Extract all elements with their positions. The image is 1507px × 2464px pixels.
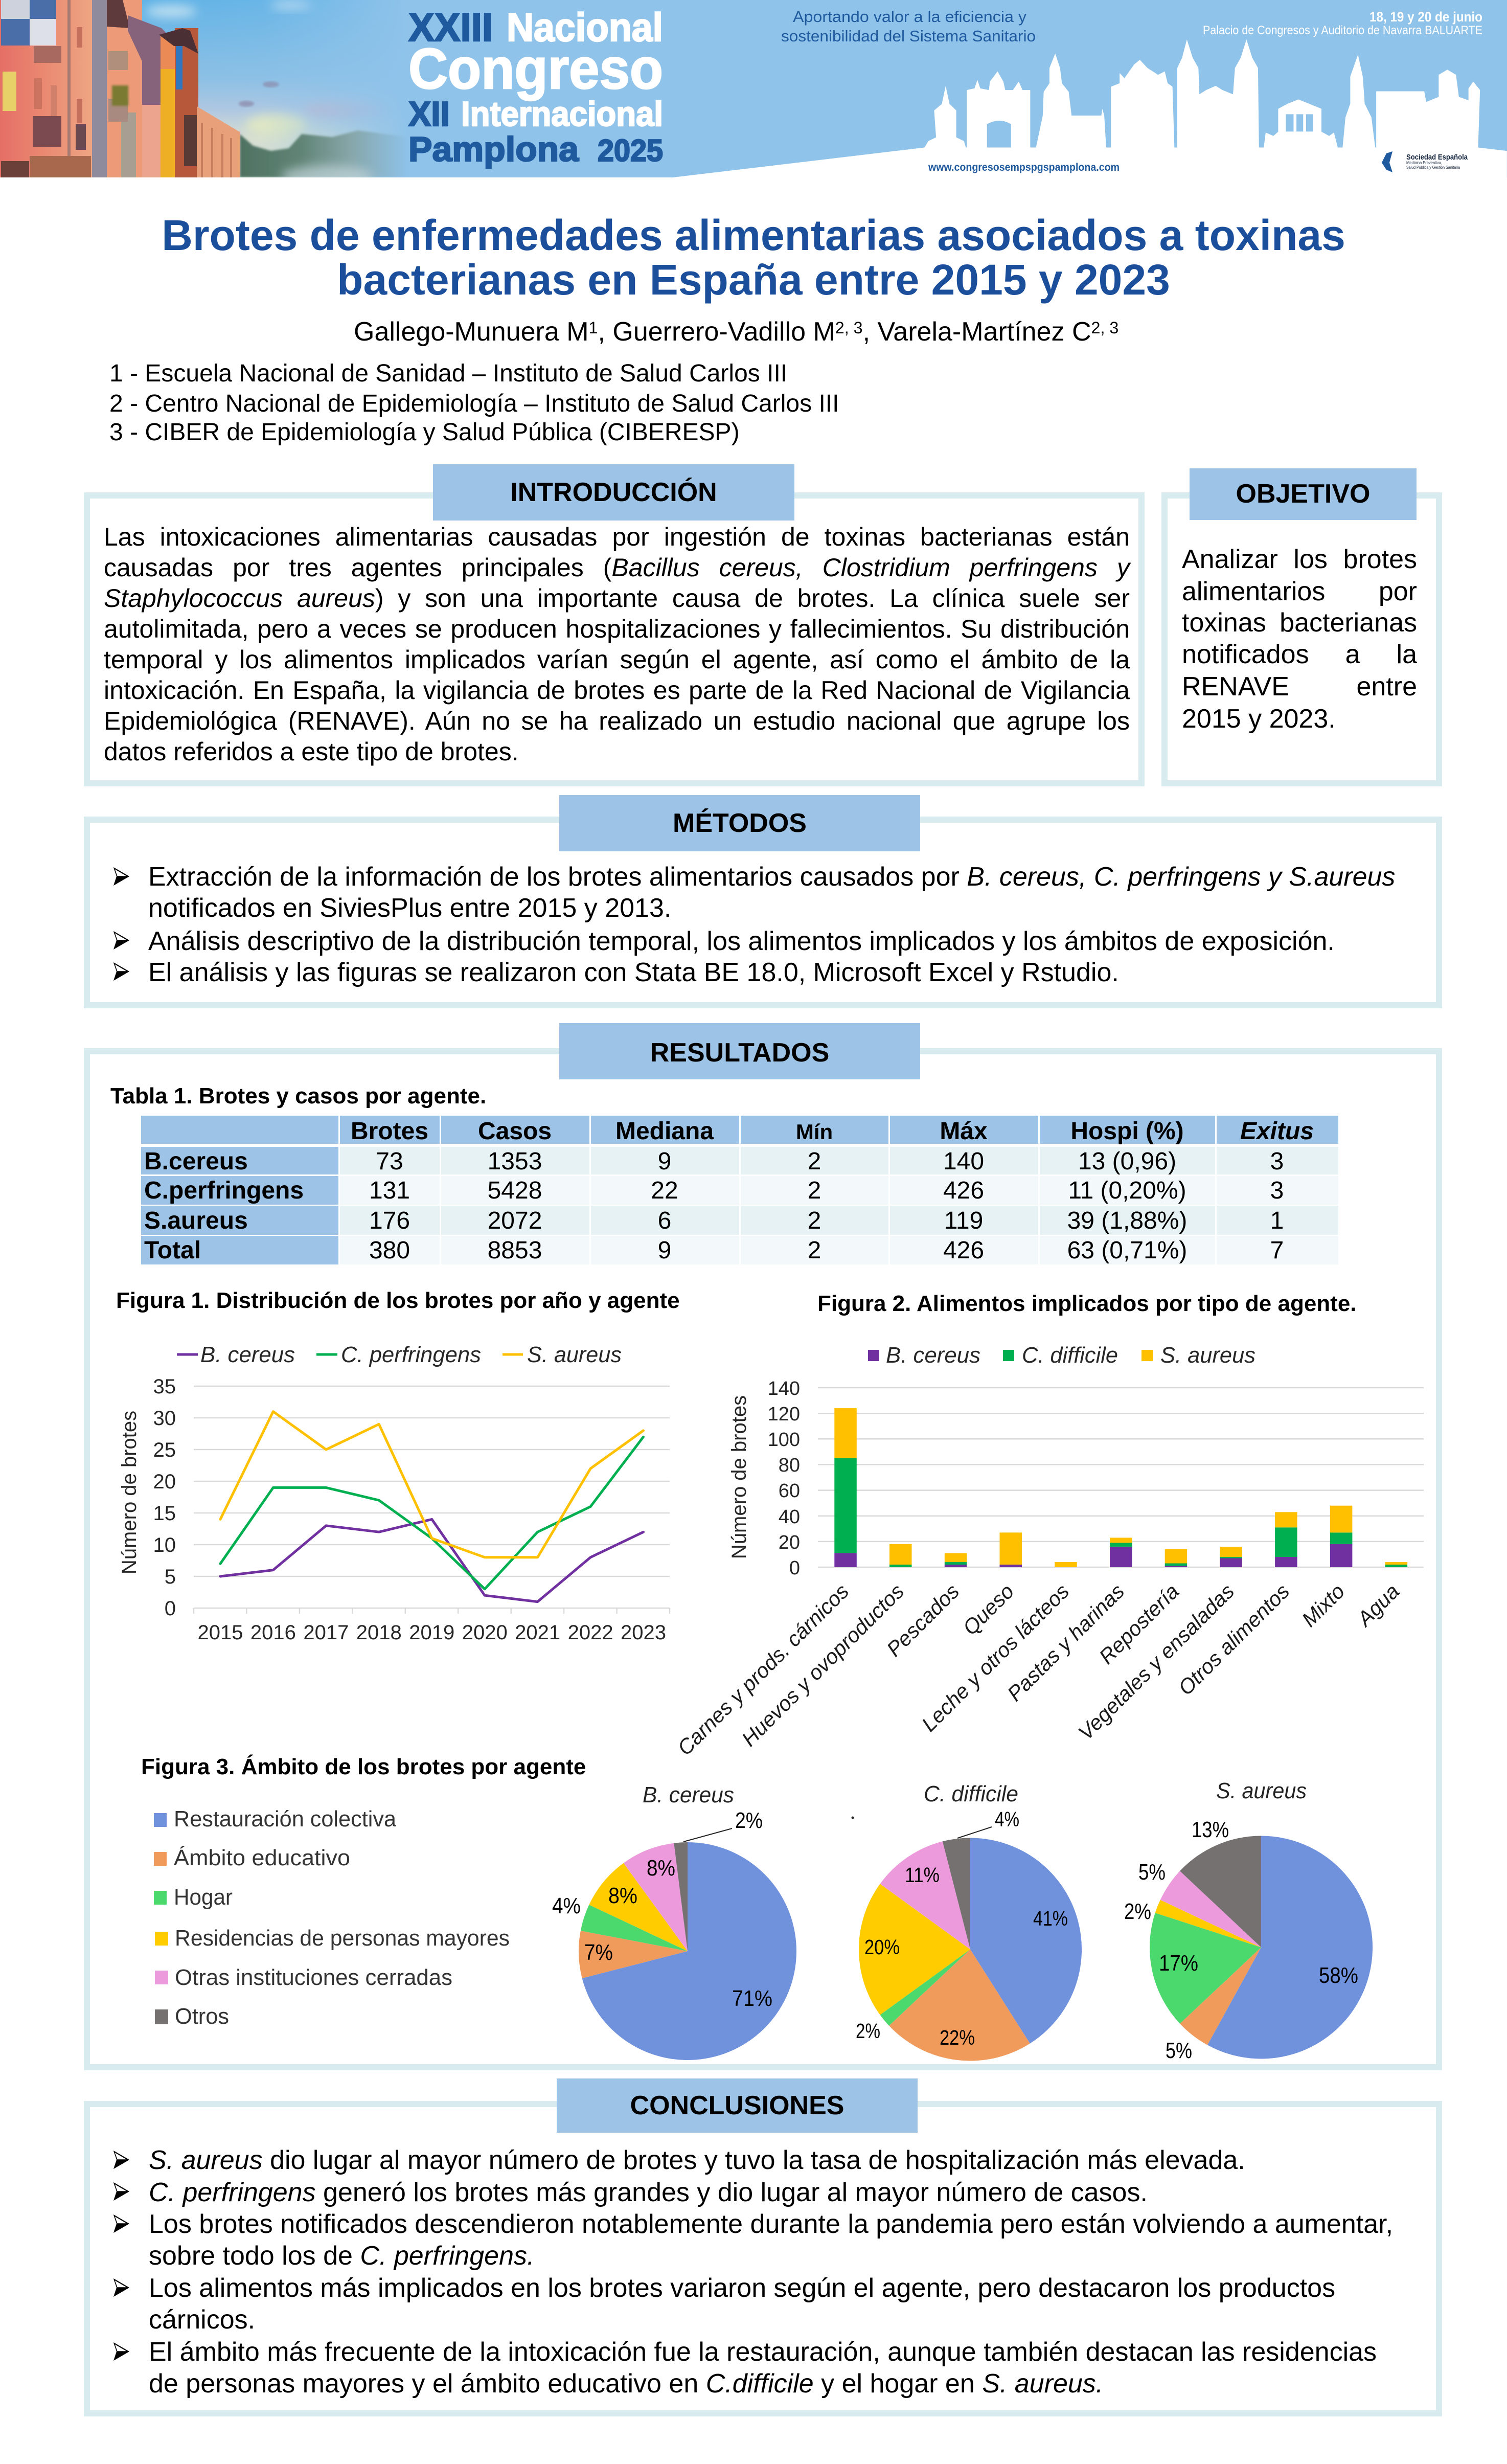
pie chart: B. cereus <box>552 1782 796 2060</box>
congress date and venue: Palacio de Congresos y Auditorio de Navarra BALUARTE <box>1203 24 1482 37</box>
figure 1 legend: S. aureus <box>527 1342 622 1367</box>
figure 1 legend: B. cereus <box>200 1342 295 1367</box>
table 1: 6 <box>658 1207 671 1234</box>
affiliations: 3 - CIBER de Epidemiología y Salud Pública (CIBERESP) <box>109 419 740 446</box>
pie chart: C. difficile: 2% <box>856 2019 880 2043</box>
pie chart: B. cereus: B. cereus <box>643 1782 734 1807</box>
table 1: 9 <box>658 1148 671 1175</box>
pie chart: S. aureus: S. aureus <box>1216 1778 1307 1803</box>
figure 3 legend <box>154 1806 510 2029</box>
congress slogan: sostenibilidad del Sistema Sanitario <box>781 27 1036 45</box>
list: conclusiones: S. aureus dio lugar al mayor número de brotes y tuvo la tasa de hospitalización más elevada. <box>149 2145 1245 2175</box>
table 1: Mín <box>796 1120 833 1144</box>
figure 3 legend: Otros <box>175 2004 229 2029</box>
figure 3 legend: Residencias de personas mayores <box>175 1926 510 1951</box>
figure 1 axis labels: 10 <box>153 1534 176 1556</box>
figure 2 category labels: Agua <box>1352 1579 1404 1632</box>
figure 1 axis labels: 2016 <box>250 1621 296 1644</box>
text block: objetivo: RENAVE entre <box>1182 672 1417 702</box>
table 1: 63 (0,71%) <box>1067 1237 1187 1264</box>
list: conclusiones: C. perfringens generó los brotes más grandes y dio lugar al mayor número de casos. <box>149 2178 1148 2207</box>
figure 2 axis labels: 20 <box>779 1532 800 1553</box>
heading: objetivo: OBJETIVO <box>1236 479 1370 509</box>
table 1: 39 (1,88%) <box>1067 1207 1187 1234</box>
figure 2 bars: S. aureus <box>834 1408 1407 1567</box>
text block: introducción: temporal y los alimentos implicados varían según el agente, así como el ámbito de la <box>104 645 1130 674</box>
figure 2 axis labels: 120 <box>768 1404 800 1425</box>
figure 2 category labels: Queso <box>958 1579 1018 1640</box>
table 1: Mediana <box>615 1118 714 1145</box>
list: métodos: Extracción de la información de los brotes alimentarios causados por B. cereus, C. perfringens y S.aureus <box>148 862 1395 892</box>
table 1: 131 <box>369 1177 410 1204</box>
congress name: 2025 <box>598 133 663 168</box>
table 1: Exitus <box>1240 1118 1314 1145</box>
pie chart: S. aureus: 58% <box>1319 1963 1358 1988</box>
list: conclusiones <box>113 2145 1393 2399</box>
figure 2 legend: C. difficile <box>1022 1343 1118 1368</box>
society logo: Sociedad Española <box>1406 153 1468 162</box>
figure 2 legend: B. cereus <box>886 1343 980 1368</box>
society logo <box>1382 151 1468 172</box>
figure 1 axis labels: 2019 <box>409 1621 454 1644</box>
pie chart: B. cereus: 2% <box>735 1808 763 1833</box>
figure 1 axis labels: 15 <box>153 1502 176 1525</box>
congress name: XXIII <box>408 5 493 50</box>
panel: resultados <box>84 1023 1442 2070</box>
society logo: Medicina Preventiva, <box>1406 161 1442 165</box>
table 1: 5428 <box>488 1177 542 1204</box>
heading: métodos: MÉTODOS <box>673 808 807 838</box>
figure 1 axis labels: 25 <box>153 1439 176 1461</box>
figure 1 axis labels: 5 <box>165 1566 176 1588</box>
text block: objetivo: Analizar los brotes <box>1182 545 1417 574</box>
affiliations: 1 - Escuela Nacional de Sanidad – Instituto de Salud Carlos III <box>109 360 787 387</box>
pie chart: C. difficile: C. difficile <box>924 1781 1018 1806</box>
figure 3 title: Figura 3. Ámbito de los brotes por agente <box>141 1754 586 1779</box>
table 1: B.cereus <box>144 1148 248 1175</box>
congress slogan <box>781 8 1036 45</box>
table 1: 119 <box>944 1207 983 1234</box>
figure 2: stacked bar chart: Número de brotes <box>728 1395 750 1559</box>
table 1: 2 <box>808 1177 821 1204</box>
figure 1 title: Figura 1. Distribución de los brotes por año y agente <box>116 1288 680 1313</box>
text block: introducción: intoxicación. En España, la vigilancia de brotes es parte de la Red Nacional de Vigilancia <box>104 676 1130 705</box>
figure 3 legend: Ámbito educativo <box>174 1845 350 1870</box>
table 1: 2072 <box>488 1207 542 1234</box>
figure 2 category labels: Carnes y prods. cárnicos <box>673 1579 853 1760</box>
text block: introducción: Staphylococcus aureus) y son una importante causa de brotes. La clínica suele ser <box>104 584 1130 613</box>
pie chart: S. aureus: 13% <box>1192 1817 1229 1842</box>
figure 1 axis labels: 30 <box>153 1407 176 1430</box>
list: conclusiones: El ámbito más frecuente de la intoxicación fue la restauración, aunque también destacan las residencias <box>149 2337 1377 2367</box>
text block: introducción: datos referidos a este tipo de brotes. <box>104 737 519 766</box>
heading: resultados <box>559 1023 920 1079</box>
table 1: 8853 <box>488 1237 542 1264</box>
panel: conclusiones <box>84 2078 1442 2416</box>
table 1: 3 <box>1270 1177 1284 1204</box>
text block: objetivo: notificados a la <box>1182 640 1417 669</box>
figure 2 category labels: Mixto <box>1297 1579 1349 1632</box>
pie chart: C. difficile: 22% <box>940 2026 975 2049</box>
heading: métodos <box>559 795 920 851</box>
pie chart: C. difficile: 20% <box>864 1935 900 1959</box>
figure 2 legend: S. aureus <box>1160 1343 1255 1368</box>
title <box>162 211 1345 304</box>
table 1: 380 <box>369 1237 410 1264</box>
table 1: 7 <box>1270 1237 1284 1264</box>
figure 1 axis labels: 2015 <box>198 1621 243 1644</box>
figure 3 legend: Restauración colectiva <box>174 1806 397 1832</box>
panel: objetivo <box>1161 468 1442 786</box>
pie chart: S. aureus: 5% <box>1138 1860 1166 1885</box>
table 1: 426 <box>943 1237 984 1264</box>
figure 2 axis labels: 80 <box>779 1455 800 1476</box>
pie chart: S. aureus: 17% <box>1159 1951 1198 1976</box>
figure 1 series <box>220 1412 643 1602</box>
panel: introducción <box>84 464 1145 786</box>
table 1: 426 <box>943 1177 984 1204</box>
table 1: 13 (0,96) <box>1078 1148 1176 1175</box>
table 1: 2 <box>808 1207 821 1234</box>
figure 1 axis labels: 2023 <box>621 1621 666 1644</box>
figure 1 axis labels: Número de brotes <box>118 1411 141 1574</box>
figure 2 axis labels: 40 <box>779 1506 800 1528</box>
congress name: Congreso <box>408 37 663 101</box>
heading: objetivo <box>1190 468 1417 520</box>
pie chart: C. difficile: 4% <box>995 1807 1019 1831</box>
text block: objetivo: 2015 y 2023. <box>1182 704 1336 734</box>
list: conclusiones: Los alimentos más implicados en los brotes variaron según el agente, pero destacaron los productos <box>149 2273 1335 2303</box>
figure 2 category labels: Otros alimentos <box>1174 1579 1294 1700</box>
banner skyline <box>673 39 1507 177</box>
figure 2 category labels <box>673 1579 1404 1760</box>
society logo: Salud Pública y Gestión Sanitaria <box>1406 165 1460 170</box>
figure 1 axis labels <box>118 1375 666 1644</box>
table 1: 3 <box>1270 1148 1284 1175</box>
list: métodos: El análisis y las figuras se realizaron con Stata BE 18.0, Microsoft Excel y Rstudio. <box>148 958 1119 987</box>
figure 2 category labels: Huevos y ovoproductos <box>737 1579 908 1751</box>
text block: introducción <box>104 523 1131 766</box>
pie chart: B. cereus: 8% <box>647 1856 675 1881</box>
figure 2 category labels: Leche y otros lácteos <box>917 1579 1074 1736</box>
text block: introducción: causadas por tres agentes principales (Bacillus cereus, Clostridium perfringens y <box>104 553 1130 582</box>
table 1: 73 <box>376 1148 403 1175</box>
heading: conclusiones <box>557 2078 918 2133</box>
figure 2 axis labels: 0 <box>789 1557 800 1579</box>
heading: conclusiones: CONCLUSIONES <box>630 2091 844 2120</box>
figure 1 axis labels: 2020 <box>462 1621 508 1644</box>
figure 2 axis labels: 140 <box>768 1378 800 1399</box>
table 1: Brotes <box>351 1118 428 1145</box>
table title: Tabla 1. Brotes y casos por agente. <box>110 1083 486 1109</box>
figure 2: stacked bar chart <box>673 1343 1424 1760</box>
affiliations: 2 - Centro Nacional de Epidemiología – Instituto de Salud Carlos III <box>109 390 839 417</box>
table 1 <box>141 1116 1338 1264</box>
figure 1: line chart <box>118 1342 670 1644</box>
text block: objetivo <box>1182 545 1417 734</box>
table 1: 176 <box>369 1207 410 1234</box>
list: conclusiones: Los brotes notificados descendieron notablemente durante la pandemia pero están volviendo a aumentar, <box>149 2209 1393 2239</box>
header banner <box>0 0 1507 177</box>
pie chart: C. difficile: 11% <box>905 1863 940 1887</box>
table 1: 9 <box>658 1237 671 1264</box>
figure 1 axis labels: 0 <box>165 1597 176 1620</box>
pie chart: B. cereus: 7% <box>584 1940 613 1965</box>
congress website: www.congresosempspgspamplona.com <box>928 162 1120 173</box>
figure 1 axis labels: 2017 <box>303 1621 349 1644</box>
figure 2 category labels: Repostería <box>1094 1579 1183 1668</box>
panel: métodos <box>84 795 1442 1008</box>
affiliations <box>109 360 839 446</box>
figure 3 legend: Hogar <box>174 1885 233 1910</box>
congress name: Pamplona <box>408 130 579 169</box>
list: métodos <box>113 862 1395 987</box>
text block: introducción: Epidemiológica (RENAVE). Aún no se ha realizado un estudio nacional que agrupe los <box>104 707 1130 735</box>
table 1: Total <box>144 1237 201 1264</box>
pie chart: B. cereus: 4% <box>552 1893 581 1918</box>
figure 2 axis labels <box>768 1378 800 1579</box>
figure 2 category labels: Vegetales y ensaladas <box>1074 1579 1239 1745</box>
list: conclusiones: cárnicos. <box>149 2305 255 2335</box>
table 1: 11 (0,20%) <box>1068 1177 1186 1204</box>
figure 1 legend: C. perfringens <box>341 1342 481 1367</box>
title: Brotes de enfermedades alimentarias asociados a toxinas <box>162 211 1345 259</box>
table 1: C.perfringens <box>144 1177 304 1204</box>
pie chart: B. cereus: 71% <box>732 1986 772 2011</box>
figure 2 bars: C. difficile <box>834 1458 1407 1567</box>
figure 1 axis labels: 2022 <box>568 1621 613 1644</box>
authors: Gallego-Munuera M1, Guerrero-Vadillo M2, 3, Varela-Martínez C2, 3 <box>354 317 1118 347</box>
heading: introducción: INTRODUCCIÓN <box>510 478 717 507</box>
figure 2 axis labels: 100 <box>768 1429 800 1451</box>
list: métodos: Análisis descriptivo de la distribución temporal, los alimentos implicados y los ámbitos de exposición. <box>148 926 1335 956</box>
pie chart: C. difficile <box>852 1781 1082 2061</box>
figure 2 category labels: Pastas y harinas <box>1003 1579 1129 1706</box>
heading: introducción <box>433 464 794 521</box>
table 1: 22 <box>651 1177 678 1204</box>
figure 1 axis labels: 2018 <box>356 1621 402 1644</box>
congress date and venue: 18, 19 y 20 de junio <box>1369 9 1482 25</box>
figure 2 axis labels: 60 <box>779 1480 800 1502</box>
figure 1 axis labels: 35 <box>153 1375 176 1398</box>
table 1: 1 <box>1270 1207 1284 1234</box>
figure 2 legend <box>868 1343 1255 1368</box>
table 1: Casos <box>478 1118 552 1145</box>
figure 3 legend: Otras instituciones cerradas <box>175 1965 452 1990</box>
heading: resultados: RESULTADOS <box>650 1038 829 1068</box>
congress name: Internacional <box>461 95 663 133</box>
table 1: Hospi (%) <box>1070 1118 1184 1145</box>
figure 2 bars: B. cereus <box>834 1544 1352 1567</box>
pie chart: B. cereus: 8% <box>608 1883 637 1908</box>
table 1: 1353 <box>488 1148 542 1175</box>
table 1: 2 <box>808 1237 821 1264</box>
title: bacterianas en España entre 2015 y 2023 <box>337 256 1170 304</box>
figure 2 title: Figura 2. Alimentos implicados por tipo de agente. <box>817 1291 1357 1316</box>
table 1: 140 <box>943 1148 984 1175</box>
congress slogan: Aportando valor a la eficiencia y <box>793 8 1027 26</box>
list: métodos: notificados en SiviesPlus entre 2015 y 2013. <box>148 893 671 923</box>
figure 1 axis labels: 2021 <box>515 1621 560 1644</box>
congress name <box>408 5 663 169</box>
text block: objetivo: alimentarios por <box>1182 577 1417 606</box>
figure 1 axis labels: 20 <box>153 1471 176 1493</box>
text block: objetivo: toxinas bacterianas <box>1182 608 1417 638</box>
pie chart: S. aureus: 2% <box>1124 1899 1151 1924</box>
congress name: XII <box>408 95 450 133</box>
table 1: S.aureus <box>144 1207 248 1234</box>
pie chart: S. aureus: 5% <box>1166 2038 1192 2063</box>
text block: introducción: Las intoxicaciones alimentarias causadas por ingestión de toxinas bacterianas están <box>104 523 1130 551</box>
text block: introducción: autolimitada, pero a veces se producen hospitalizaciones y fallecimientos. Su distribución <box>104 615 1130 643</box>
figure 1 legend <box>177 1342 622 1367</box>
banner photo: street of Pamplona <box>0 0 409 188</box>
congress name: Nacional <box>507 5 663 50</box>
list: conclusiones: de personas mayores y el ámbito educativo en C.difficile y el hogar en S. aureus. <box>149 2369 1103 2399</box>
list: conclusiones: sobre todo los de C. perfringens. <box>149 2241 534 2271</box>
figure 2 category labels: Pescados <box>882 1579 964 1661</box>
pie chart: S. aureus <box>1124 1778 1373 2063</box>
congress date and venue <box>1203 9 1482 37</box>
pie chart: C. difficile: 41% <box>1033 1907 1068 1930</box>
table 1: Máx <box>940 1118 988 1145</box>
table 1: 2 <box>808 1148 821 1175</box>
